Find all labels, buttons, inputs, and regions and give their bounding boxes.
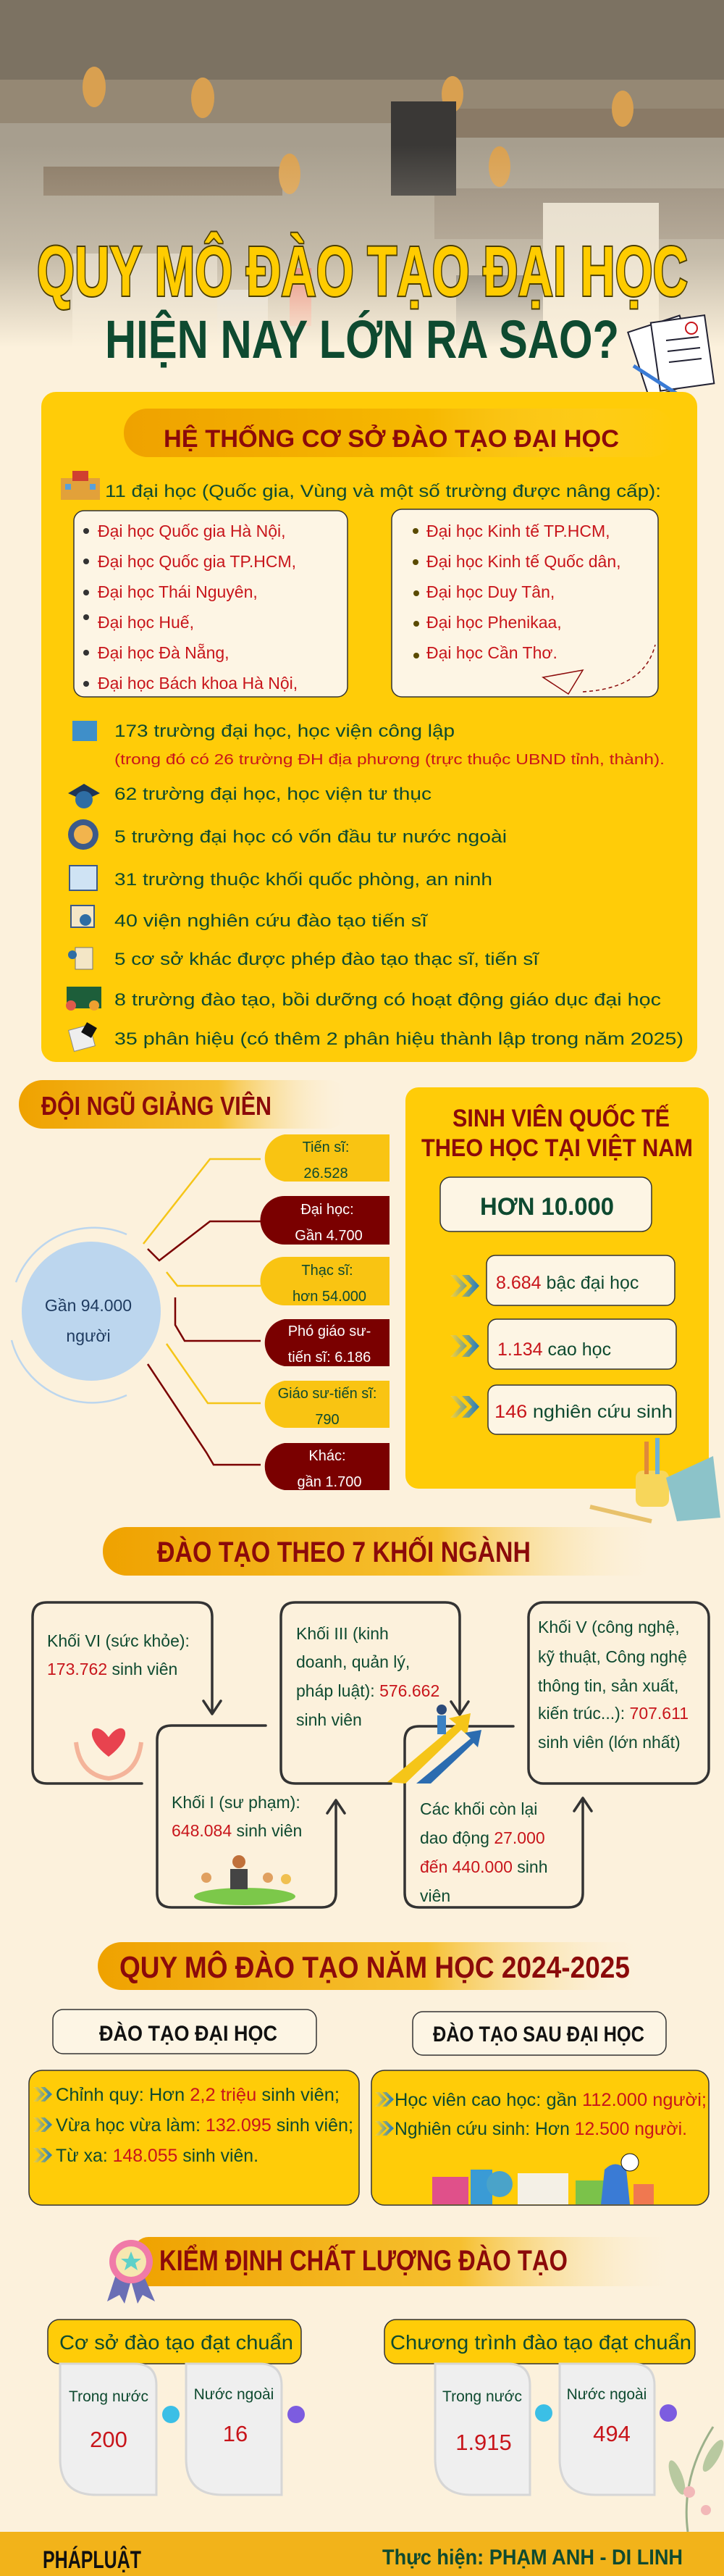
panel: sinh vien quoc te	[405, 1087, 709, 1489]
pill: thac si	[261, 1257, 390, 1305]
list: institution counts: 40 viện nghiên cứu đào tạo tiến sĩ	[114, 911, 429, 931]
icons: institution list	[66, 721, 101, 1051]
credit: Thực hiện: PHẠM ANH - DI LINH	[382, 2546, 683, 2569]
heading: he thong	[124, 409, 674, 457]
card: nuoc ngoai 16: Nước ngoài	[194, 2386, 274, 2403]
icon: flower branch	[665, 2427, 724, 2532]
text: cac khoi con lai: dao động 27.000	[420, 1828, 545, 1847]
panel: he thong co so dao tao	[41, 392, 697, 1062]
list: right universities: Đại học Phenikaa,	[426, 613, 562, 632]
pill: pho giao su: tiến sĩ: 6.186	[288, 1350, 371, 1366]
text: cac khoi con lai: viên	[420, 1886, 450, 1905]
pill: dai hoc	[261, 1196, 390, 1245]
heading: quy mo dao tao nam hoc: QUY MÔ ĐÀO TẠO NĂM HỌC 2024-2025	[119, 1949, 630, 1984]
list: left universities: Đại học Đà Nẵng,	[98, 643, 230, 662]
list: left universities: Đại học Quốc gia Hà Nội,	[98, 522, 286, 540]
circle: total	[22, 1242, 161, 1381]
label: dao tao sau dai hoc	[413, 2012, 666, 2055]
card: trong nuoc 1.915	[435, 2364, 530, 2495]
card: trong nuoc 200: 200	[90, 2427, 127, 2452]
panel: postgrad stats	[371, 2070, 709, 2205]
card: nuoc ngoai 16	[186, 2364, 282, 2495]
title	[37, 232, 688, 369]
pill: dai hoc: Đại học:	[300, 1202, 354, 1218]
list: institution counts: 62 trường đại học, học viện tư thục	[114, 785, 432, 804]
callout: hon 10.000: HƠN 10.000	[480, 1193, 614, 1221]
list: right universities: Đại học Kinh tế TP.HCM,	[426, 522, 610, 540]
text: khoi III: Khối III (kinh	[296, 1624, 389, 1643]
heading: doi ngu giang vien	[19, 1080, 351, 1129]
pill: giao su: 790	[315, 1412, 340, 1428]
pill: khac: gần 1.700	[298, 1474, 361, 1490]
label: dao tao sau dai hoc: ĐÀO TẠO SAU ĐẠI HỌC	[433, 2022, 644, 2046]
pill: thac si: Thạc sĩ:	[301, 1263, 353, 1279]
text: khoi III: doanh, quản lý,	[296, 1652, 410, 1671]
text: khoi VI	[47, 1631, 190, 1678]
text: khoi V: kiến trúc...): 707.611	[538, 1704, 689, 1723]
list: right universities	[392, 509, 658, 697]
panel: undergrad stats: Từ xa: 148.055 sinh viên.	[56, 2146, 258, 2166]
text: khoi V	[538, 1618, 689, 1752]
pill: giao su	[265, 1381, 390, 1428]
heading: dao tao theo 7 khoi nganh	[103, 1527, 660, 1576]
icon: papers and pen	[628, 315, 714, 398]
photo background	[0, 0, 724, 348]
item: 8.684	[450, 1255, 675, 1305]
card: nuoc ngoai 494: 494	[593, 2421, 631, 2446]
card: nuoc ngoai 16: 16	[223, 2421, 248, 2446]
card: trong nuoc 200	[60, 2364, 156, 2495]
list: left universities: Đại học Huế,	[98, 613, 194, 632]
pill: giao su: Giáo sư-tiến sĩ:	[278, 1386, 376, 1402]
list: right universities: Đại học Cần Thơ.	[426, 643, 557, 662]
icon: badge	[107, 2240, 155, 2304]
item: 8.684: 8.684 bậc đại học	[496, 1273, 639, 1293]
pill: pho giao su: Phó giáo sư-	[288, 1323, 371, 1339]
icon: stationery	[590, 1438, 720, 1521]
text: khoi I: 648.084 sinh viên	[172, 1821, 302, 1840]
label: dao tao dai hoc: ĐÀO TẠO ĐẠI HỌC	[99, 2021, 277, 2046]
icon: heart hands	[76, 1728, 141, 1778]
list: left universities: Đại học Quốc gia TP.HCM,	[98, 552, 296, 571]
pill: khac: Khác:	[308, 1448, 346, 1464]
item: 1.134	[450, 1319, 676, 1369]
panel: co so dao tao dat chuan: Cơ sở đào tạo đạt chuẩn	[59, 2331, 293, 2354]
text: khoi V: thông tin, sản xuất,	[538, 1676, 678, 1695]
item: 146: 146 nghiên cứu sinh	[494, 1402, 673, 1422]
text: khoi I: Khối I (sư phạm):	[172, 1793, 300, 1812]
list: institution counts: 35 phân hiệu (có thêm 2 phân hiệu thành lập trong năm 2025)	[114, 1029, 683, 1049]
pill: tien si: 26.528	[303, 1166, 348, 1182]
heading: quy mo dao tao nam hoc	[98, 1942, 647, 1990]
callout: hon 10.000	[440, 1177, 652, 1231]
text: cac khoi con lai	[420, 1799, 547, 1905]
list: right universities: Đại học Duy Tân,	[426, 582, 555, 601]
text: khoi VI: Khối VI (sức khỏe):	[47, 1631, 190, 1650]
panel: sinh vien quoc te: THEO HỌC TẠI VIỆT NAM	[421, 1134, 693, 1162]
pill: thac si: hơn 54.000	[292, 1289, 366, 1305]
text: cac khoi con lai: đến 440.000 sinh	[420, 1857, 547, 1876]
icon: teacher kids	[194, 1855, 295, 1905]
card: trong nuoc 1.915: 1.915	[455, 2430, 512, 2455]
panel: postgrad stats: Học viên cao học: gần 112.000 người;	[395, 2090, 707, 2110]
heading: he thong: HỆ THỐNG CƠ SỞ ĐÀO TẠO ĐẠI HỌC	[164, 425, 619, 453]
pill: tien si	[265, 1134, 390, 1182]
panel: undergrad stats: Chỉnh quy: Hơn 2,2 triệu sinh viên;	[56, 2085, 340, 2105]
card: nuoc ngoai 494	[560, 2364, 654, 2495]
list: institution counts: 5 cơ sở khác được phép đào tạo thạc sĩ, tiến sĩ	[114, 950, 540, 969]
box: cac khoi con lai	[405, 1726, 592, 1907]
list: right universities: Đại học Kinh tế Quốc dân,	[426, 552, 621, 571]
list: left universities: Đại học Thái Nguyên,	[98, 582, 258, 601]
icon: school supplies	[432, 2154, 654, 2204]
box: khoi I	[157, 1726, 345, 1907]
heading: dao tao theo 7 khoi nganh: ĐÀO TẠO THEO 7 KHỐI NGÀNH	[157, 1535, 531, 1568]
text: khoi V: Khối V (công nghệ,	[538, 1618, 680, 1636]
footer	[0, 2532, 724, 2576]
text: khoi V: kỹ thuật, Công nghệ	[538, 1647, 687, 1666]
heading: kiem dinh chat luong: KIỂM ĐỊNH CHẤT LƯỢNG ĐÀO TẠO	[159, 2243, 568, 2277]
text: khoi III: sinh viên	[296, 1710, 362, 1729]
heading: doi ngu giang vien: ĐỘI NGŨ GIẢNG VIÊN	[41, 1090, 272, 1121]
box: khoi III	[281, 1602, 468, 1783]
card: nuoc ngoai 494: Nước ngoài	[567, 2386, 647, 2403]
pill: khac	[265, 1443, 390, 1490]
list: left universities	[74, 511, 348, 697]
text: khoi III	[296, 1624, 439, 1729]
title: HIỆN NAY LỚN RA SAO?	[105, 309, 619, 369]
card: trong nuoc 200: Trong nước	[69, 2388, 148, 2405]
text: khoi III: pháp luật): 576.662	[296, 1681, 439, 1700]
circle: total: người	[66, 1326, 111, 1345]
list: institution counts: 173 trường đại học, học viện công lập	[114, 722, 455, 741]
pill: dai hoc: Gần 4.700	[295, 1228, 363, 1244]
list: left universities: Đại học Bách khoa Hà Nội,	[98, 674, 298, 693]
panel: sinh vien quoc te: SINH VIÊN QUỐC TẾ	[452, 1104, 670, 1132]
chart: lecturer tree	[12, 1134, 390, 1490]
list: institution counts: 31 trường thuộc khối quốc phòng, an ninh	[114, 870, 492, 890]
panel: undergrad stats: Vừa học vừa làm: 132.095 sinh viên;	[56, 2115, 353, 2136]
icon: growth arrows	[387, 1705, 481, 1783]
box: khoi VI	[33, 1602, 221, 1783]
flow: 7 khoi nganh	[33, 1602, 709, 1907]
list: institution counts: 8 trường đào tạo, bồi dưỡng có hoạt động giáo dục đại học	[114, 990, 661, 1010]
circle: total: Gần 94.000	[45, 1296, 132, 1315]
card: trong nuoc 1.915: Trong nước	[442, 2388, 522, 2405]
label: dao tao dai hoc	[53, 2010, 316, 2054]
list: institution counts: 5 trường đại học có vốn đầu tư nước ngoài	[114, 827, 507, 847]
text: khoi VI: 173.762 sinh viên	[47, 1660, 177, 1678]
logo: phap luat: PHÁPLUẬT	[43, 2546, 141, 2574]
text: khoi I	[172, 1793, 302, 1840]
list: institution counts: (trong đó có 26 trường ĐH địa phương (trực thuộc UBND tỉnh, thành).	[114, 752, 665, 768]
box: khoi V	[529, 1602, 709, 1783]
text: khoi V: sinh viên (lớn nhất)	[538, 1733, 681, 1752]
panel: chuong trinh dao tao dat chuan	[384, 2320, 695, 2495]
icon: school	[61, 471, 100, 500]
list: institution counts	[114, 722, 683, 1049]
text: cac khoi con lai: Các khối còn lại	[420, 1799, 537, 1818]
panel: postgrad stats: Nghiên cứu sinh: Hơn 12.500 người.	[395, 2119, 687, 2139]
panel: undergrad stats	[29, 2070, 359, 2205]
pill: pho giao su	[265, 1319, 390, 1366]
pill: tien si: Tiến sĩ:	[303, 1139, 349, 1155]
item: 1.134: 1.134 cao học	[497, 1339, 611, 1360]
text: 11 dai hoc: 11 đại học (Quốc gia, Vùng và một số trường được nâng cấp):	[105, 482, 661, 501]
panel: co so dao tao dat chuan	[48, 2320, 305, 2495]
panel: chuong trinh dao tao dat chuan: Chương trình đào tạo đạt chuẩn	[390, 2331, 691, 2354]
heading: kiem dinh chat luong	[107, 2237, 678, 2304]
item: 146	[450, 1385, 676, 1434]
